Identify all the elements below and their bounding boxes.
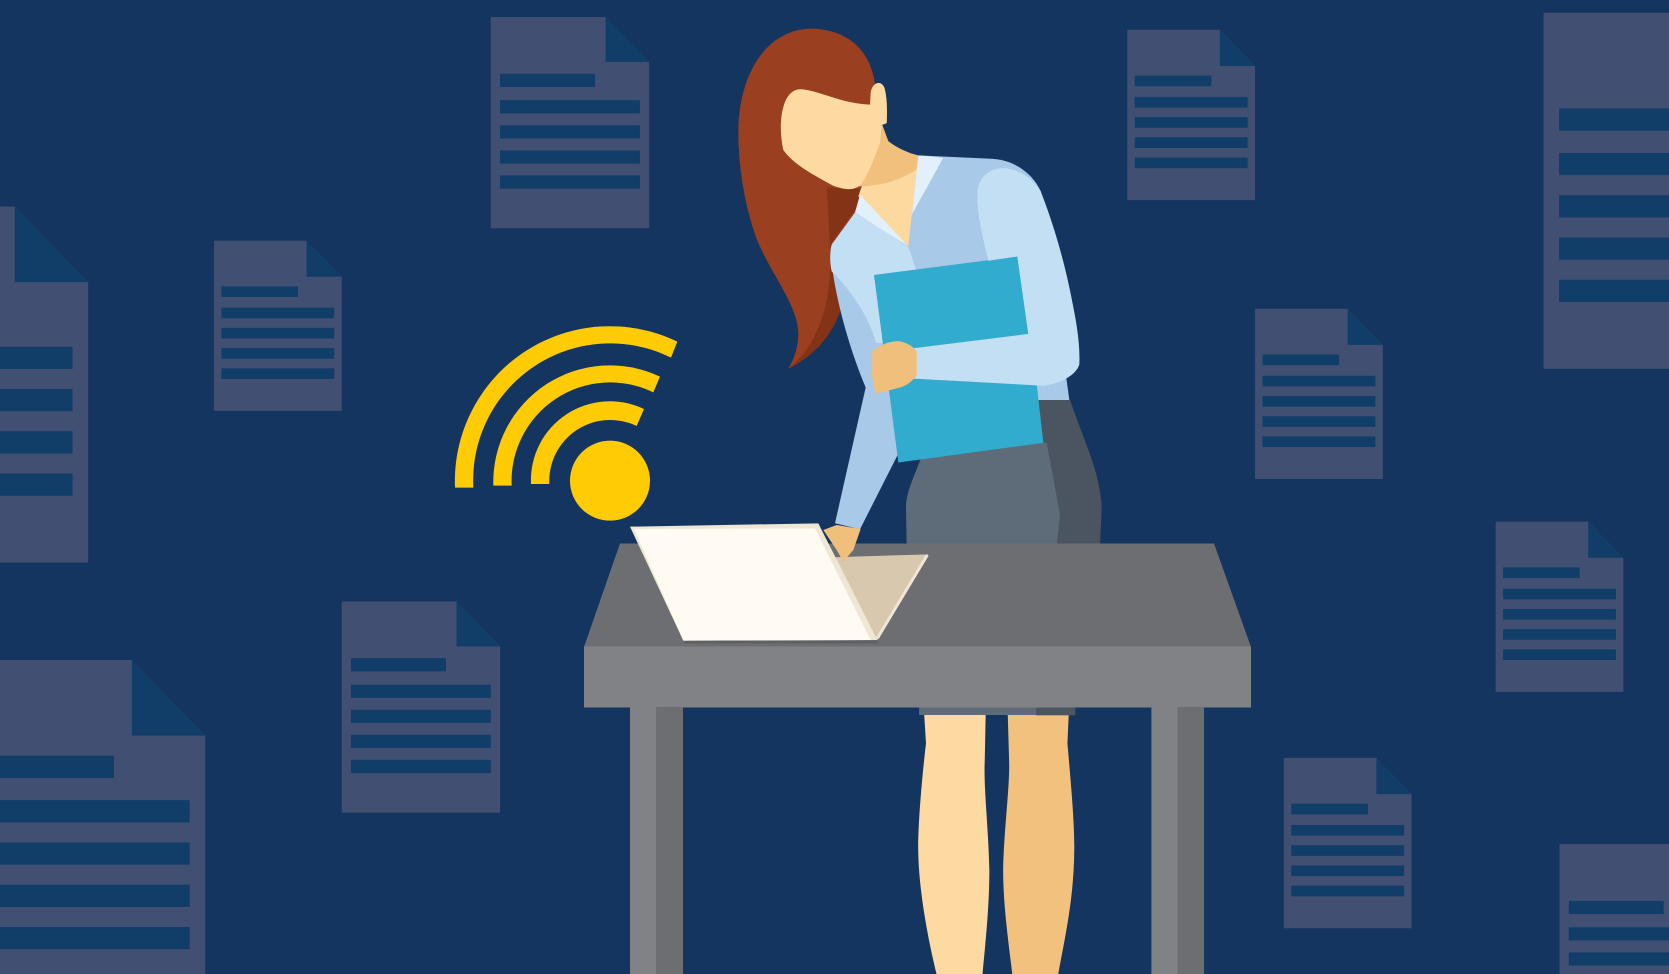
laptop lid edge xyxy=(630,523,877,641)
table top xyxy=(584,544,1251,647)
laptop screen xyxy=(634,528,871,641)
table leg left xyxy=(630,707,683,974)
icon: wifi signal xyxy=(455,326,677,521)
table xyxy=(584,544,1251,974)
skirt shadow xyxy=(1033,400,1102,546)
document: bottom right corner xyxy=(1559,844,1669,974)
document: left edge, large xyxy=(0,207,88,562)
collar right xyxy=(912,155,943,214)
laptop shadow xyxy=(683,641,879,643)
document: middle right xyxy=(1255,309,1383,479)
folder xyxy=(874,256,1043,462)
hair xyxy=(738,29,875,369)
laptop and typing hand xyxy=(630,523,928,643)
document: top centre-left xyxy=(491,17,649,228)
right arm xyxy=(913,168,1079,386)
neck and chest xyxy=(858,159,923,246)
shirt body xyxy=(908,155,1069,400)
document: lower centre-left xyxy=(342,601,500,813)
laptop base edge xyxy=(877,555,927,638)
neck shadow xyxy=(857,123,918,186)
document: right side xyxy=(1496,522,1623,692)
document: upper left xyxy=(214,241,342,411)
face xyxy=(781,83,887,189)
collar left xyxy=(855,195,908,246)
woman: legs xyxy=(918,705,1075,974)
woman: upper body xyxy=(738,29,1102,546)
skirt xyxy=(906,429,1060,546)
typing hand xyxy=(823,525,861,562)
table leg right xyxy=(1151,707,1204,974)
laptop keyboard base xyxy=(830,554,928,640)
document: top centre-right xyxy=(1127,30,1255,200)
document: lower right xyxy=(1284,758,1412,928)
left shoulder xyxy=(830,212,933,343)
table front xyxy=(584,646,1251,708)
shirt shade below collar xyxy=(908,158,990,271)
document: top right, large xyxy=(1544,13,1669,369)
document: bottom left, large xyxy=(0,660,205,974)
hand on folder xyxy=(872,341,917,394)
hair shadow xyxy=(788,187,860,369)
left forearm xyxy=(832,264,898,529)
